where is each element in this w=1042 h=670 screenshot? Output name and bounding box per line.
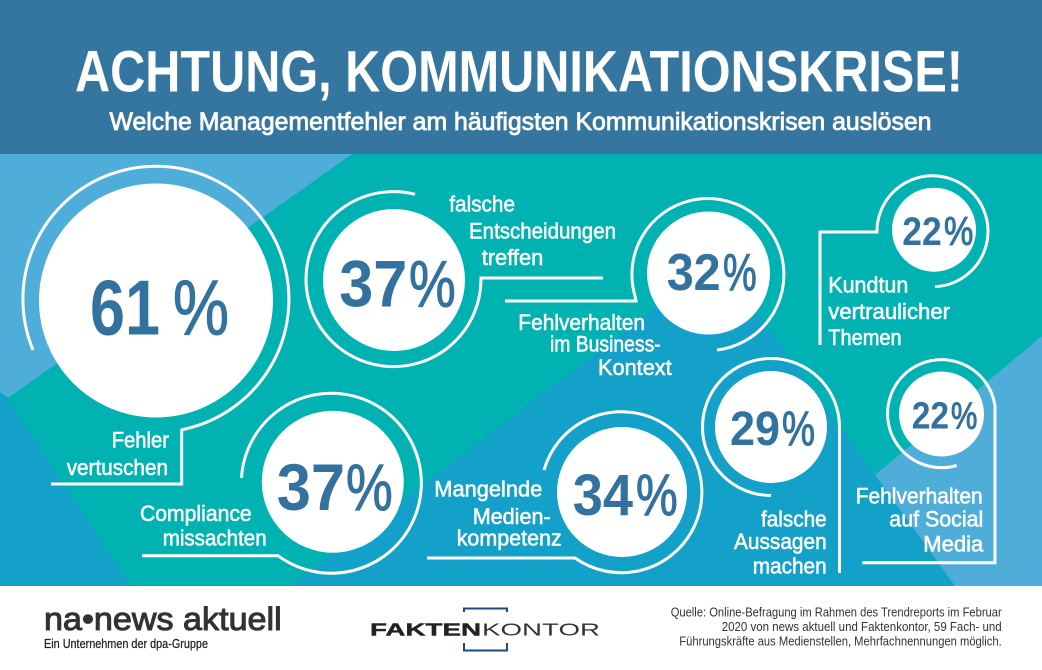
logo: Faktenkontor [370,608,600,650]
logo: news aktuell: Ein Unternehmen der dpa-Gruppe [44,637,208,651]
item: 37% falsche Entscheidungen treffen: Entscheidungen [469,218,616,243]
item: 22% Kundtun vertraulicher Themen [820,176,988,350]
item: 61% Fehler vertuschen: Fehler [112,428,169,453]
subtitle: Welche Managementfehler am häufigsten Kommunikationskrisen auslösen [110,108,932,136]
item: 37% Compliance missachten: missachten [163,526,267,551]
item: 37% Compliance missachten [140,393,421,573]
logo: Faktenkontor: KONTOR [482,620,600,640]
item: 32% Fehlverhalten im Business-Kontext: im Business- [550,332,661,357]
background panel [0,154,1042,586]
item: 22% Kundtun vertraulicher Themen: % [944,210,973,254]
item: 29% falsche Aussagen machen: % [782,403,815,456]
item: 22% Fehlverhalten auf Social Media: auf Social [889,507,983,532]
logo: news aktuell [44,601,282,651]
item: 37% Compliance missachten: Compliance [140,501,252,526]
item: 29% falsche Aussagen machen [702,358,840,578]
item: 37% falsche Entscheidungen treffen: % [409,247,456,321]
item: 37% Compliance missachten: 37 [277,450,345,524]
item: 37% falsche Entscheidungen treffen [306,192,616,367]
item: 22% Fehlverhalten auf Social Media: Fehlverhalten [856,483,983,508]
logo: Faktenkontor: FAKTEN [370,620,481,640]
item: 22% Kundtun vertraulicher Themen: 22 [902,210,942,254]
item: 34% Mangelnde Medienkompetenz: Mangelnde [434,477,542,502]
item: 37% falsche Entscheidungen treffen: falsche [449,192,515,217]
item: 29% falsche Aussagen machen: Aussagen [734,529,827,554]
item: 34% Mangelnde Medienkompetenz: % [636,463,678,528]
item: 22% Fehlverhalten auf Social Media: 22 [912,395,949,437]
item: 61% Fehler vertuschen: 61 [90,263,160,351]
item: 32% Fehlverhalten im Business-Kontext [505,199,784,380]
item: 34% Mangelnde Medienkompetenz: kompetenz [457,526,562,551]
item: 29% falsche Aussagen machen: machen [753,553,827,578]
item: 34% Mangelnde Medienkompetenz: Medien- [473,504,551,529]
logo: news aktuell: na•news aktuell [44,601,282,637]
item: 37% Compliance missachten: % [346,450,393,524]
item: 34% Mangelnde Medienkompetenz: 34 [573,463,633,528]
source note [671,606,1002,649]
item: 32% Fehlverhalten im Business-Kontext: Fehlverhalten [518,310,645,335]
item: 32% Fehlverhalten im Business-Kontext: 32 [667,244,721,302]
item: 29% falsche Aussagen machen: falsche [761,507,827,532]
item: 32% Fehlverhalten im Business-Kontext: % [723,244,757,302]
item: 22% Kundtun vertraulicher Themen: Themen [828,325,902,350]
source note: 2020 von news aktuell und Faktenkontor, 59 Fach- und [722,620,1002,634]
source note: Führungskräfte aus Medienstellen, Mehrfachnennungen möglich. [679,635,1002,649]
item: 22% Fehlverhalten auf Social Media: % [951,395,977,437]
item: 22% Fehlverhalten auf Social Media [856,360,995,563]
item: 22% Kundtun vertraulicher Themen: Kundtun [828,272,908,297]
source note: Quelle: Online-Befragung im Rahmen des Trendreports im Februar [671,606,1002,620]
item: 22% Fehlverhalten auf Social Media: Media [923,532,984,557]
item: 34% Mangelnde Medienkompetenz [427,412,702,573]
item: 61% Fehler vertuschen: % [173,263,229,351]
item: 61% Fehler vertuschen: vertuschen [67,455,168,480]
item: 32% Fehlverhalten im Business-Kontext: Kontext [598,355,672,380]
item: 61% Fehler vertuschen [23,166,289,484]
header band [0,0,1042,154]
item: 37% falsche Entscheidungen treffen: treffen [482,245,543,270]
item: 29% falsche Aussagen machen: 29 [730,403,780,456]
item: 37% falsche Entscheidungen treffen: 37 [339,247,407,321]
item: 22% Kundtun vertraulicher Themen: vertraulicher [828,299,950,324]
